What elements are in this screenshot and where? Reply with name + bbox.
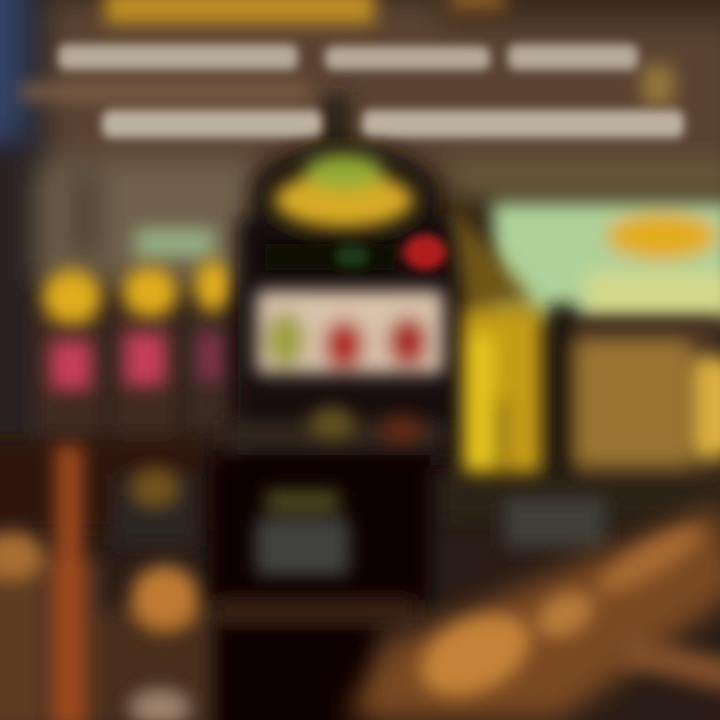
heading: illegible blurred text bars <box>58 44 684 138</box>
pink reel panels <box>50 332 222 390</box>
right background machine <box>440 305 720 548</box>
yellow side panel <box>450 200 542 473</box>
lower display <box>255 490 350 576</box>
dome lamp <box>274 154 414 228</box>
ceiling lights <box>20 0 674 155</box>
machine bodies <box>0 300 230 545</box>
heading line 2 <box>102 110 684 138</box>
foreground wooden rail <box>345 505 720 720</box>
main slot machine <box>210 143 460 720</box>
foreground left stools <box>0 445 210 720</box>
green screen on the right <box>135 202 720 318</box>
yellow machine lamps <box>42 260 232 325</box>
button panel <box>225 407 445 450</box>
indicator lights <box>265 234 447 270</box>
heading line 1 <box>58 44 638 70</box>
left row of machines <box>0 260 232 545</box>
rail highlights <box>407 516 720 712</box>
cabinet <box>210 143 460 720</box>
reel window <box>256 290 444 374</box>
